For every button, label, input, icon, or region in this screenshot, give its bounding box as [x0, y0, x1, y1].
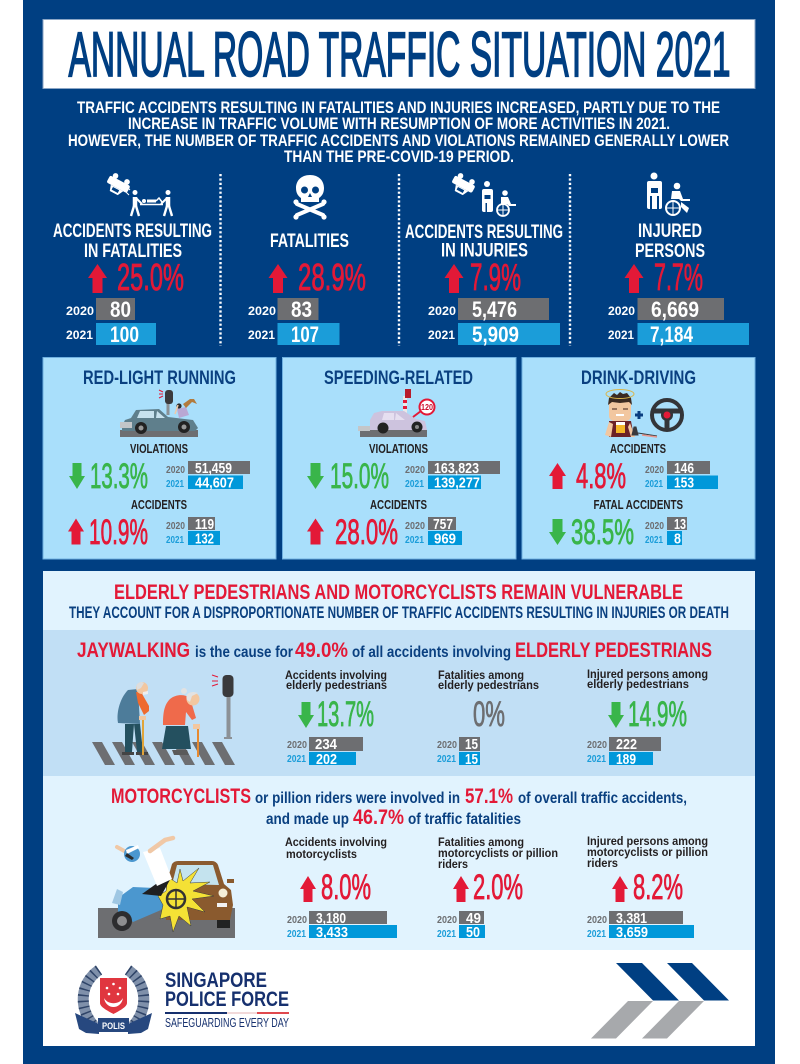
headline: of all accidents involving	[352, 644, 511, 661]
bars 2020 and 2021: 2020	[66, 304, 94, 318]
violations: 2020	[166, 465, 185, 476]
metric: injured persons among motorcyclists or pillion riders: 3,381	[616, 910, 647, 927]
accidents: 146	[674, 460, 694, 477]
metric: accidents involving elderly pedestrians: 234	[315, 736, 338, 753]
heading: IN FATALITIES	[84, 241, 182, 262]
metric: injured persons among elderly pedestrians: elderly pedestrians	[587, 677, 689, 691]
violations: VIOLATIONS	[130, 441, 188, 456]
stat: accidents resulting in injuries	[405, 171, 563, 347]
fatal accidents: 2021	[645, 535, 663, 546]
headline: 49.0%	[295, 639, 348, 662]
accidents: ACCIDENTS	[610, 441, 666, 456]
icon: chevrons	[591, 963, 729, 1038]
headline: ELDERLY PEDESTRIANS	[515, 639, 712, 662]
heading: FATALITIES	[270, 231, 349, 252]
logo: police crest: POLIS	[102, 1021, 125, 1031]
metric: fatalities among elderly pedestrians	[437, 668, 539, 768]
metric: injured persons among elderly pedestrians: 2020	[587, 740, 607, 751]
headline: 46.7%	[353, 806, 404, 829]
metric: fatalities among elderly pedestrians: 2021	[437, 754, 456, 765]
violations: 163,823	[434, 460, 479, 477]
bars 2020 and 2021: 100	[110, 322, 139, 347]
violations: 2020	[405, 465, 425, 476]
metric: fatalities among motorcyclists or pillion riders: motorcyclists or pillion	[438, 846, 558, 860]
metric: injured persons among motorcyclists or pillion riders: 2020	[587, 915, 607, 926]
change up 28.9%: 28.9%	[298, 257, 366, 299]
metric: fatalities among elderly pedestrians: 15	[465, 751, 478, 768]
change up 7.9%: 7.9%	[470, 257, 521, 299]
fatal accidents: FATAL ACCIDENTS	[594, 497, 683, 512]
bars 2020 and 2021	[248, 297, 340, 347]
accidents: 2021	[645, 479, 663, 490]
icon: overturned car and stretcher	[104, 171, 172, 216]
metric: accidents involving elderly pedestrians: 2021	[287, 754, 306, 765]
bars 2020 and 2021: 2020	[428, 304, 456, 318]
metric: fatalities among motorcyclists or pillion riders: Fatalities among	[438, 835, 524, 849]
violations: 51,459	[195, 460, 232, 477]
accidents: 2020	[405, 521, 425, 532]
metric: accidents involving elderly pedestrians: Accidents involving	[285, 668, 387, 682]
bars 2020 and 2021: 2021	[428, 328, 455, 342]
metric: fatalities among motorcyclists or pillion riders	[437, 835, 558, 941]
accidents: ACCIDENTS	[131, 497, 187, 512]
panel: red-light running	[43, 358, 276, 559]
bars 2020 and 2021	[428, 297, 560, 347]
bars 2020 and 2021: 5,909	[472, 322, 519, 347]
metric: accidents involving motorcyclists: 3,433	[316, 924, 348, 941]
metric: fatalities among elderly pedestrians: 15	[465, 736, 478, 753]
metric: injured persons among motorcyclists or pillion riders: motorcyclists or pillion	[587, 845, 708, 859]
metric: accidents involving elderly pedestrians	[285, 668, 387, 768]
bars 2020 and 2021	[66, 297, 156, 347]
metric: fatalities among elderly pedestrians: 2020	[437, 740, 457, 751]
metric: fatalities among elderly pedestrians: 0%	[473, 695, 505, 734]
bars 2020 and 2021: 107	[291, 322, 319, 347]
metric: accidents involving motorcyclists: 8.0%	[321, 868, 371, 907]
panel: motorcyclists	[43, 776, 755, 950]
intro text: THAN THE PRE-COVID-19 PERIOD.	[284, 147, 514, 166]
violations: 139,277	[434, 474, 480, 492]
icon: drunk man plus steering wheel	[605, 390, 682, 437]
metric: accidents involving motorcyclists: motorcyclists	[286, 847, 357, 861]
metric: fatalities among elderly pedestrians: elderly pedestrians	[438, 678, 539, 692]
headline: and made up	[266, 811, 349, 828]
logo: Singapore Police Force wordmark	[165, 969, 289, 1030]
headline: 57.1%	[465, 785, 513, 808]
heading: PERSONS	[635, 241, 705, 262]
metric: injured persons among elderly pedestrians: 14.9%	[628, 695, 687, 734]
violations	[307, 441, 500, 496]
icon: speeding car and speed camera	[358, 389, 434, 437]
bars 2020 and 2021: 2021	[248, 328, 275, 342]
headline: of traffic fatalities	[408, 811, 521, 828]
metric: accidents involving elderly pedestrians: 13.7%	[317, 695, 374, 734]
panel: elderly pedestrians	[43, 630, 755, 776]
violations: 15.0%	[330, 457, 389, 496]
panel: vulnerable road users header	[43, 571, 755, 630]
fatal accidents: 8	[674, 530, 681, 548]
icon: speeding car and speed camera: 120	[421, 403, 433, 412]
accidents: ACCIDENTS	[370, 497, 427, 512]
bars 2020 and 2021: 2021	[608, 328, 634, 342]
accidents: 28.0%	[335, 513, 398, 552]
accidents: 2021	[166, 535, 184, 546]
violations: 13.3%	[90, 457, 148, 496]
stat: accidents resulting in fatalities	[53, 171, 212, 347]
violations: VIOLATIONS	[369, 441, 428, 456]
intro text	[68, 98, 729, 166]
metric: accidents involving motorcyclists: 3,180	[316, 910, 346, 927]
heading: ACCIDENTS RESULTING	[53, 221, 212, 242]
metric: injured persons among motorcyclists or pillion riders: Injured persons among	[587, 834, 708, 848]
metric: injured persons among motorcyclists or pillion riders: 2021	[587, 929, 606, 940]
change up 25.0%: 25.0%	[117, 257, 184, 299]
footer panel	[43, 950, 755, 1046]
metric: accidents involving elderly pedestrians: elderly pedestrians	[286, 678, 387, 692]
change up 28.9%	[268, 257, 366, 299]
change up 7.7%: 7.7%	[654, 257, 703, 299]
logo: Singapore Police Force wordmark: SINGAPORE	[165, 969, 267, 992]
heading	[405, 222, 563, 262]
stat: fatalities	[248, 175, 366, 347]
bars 2020 and 2021: 2020	[248, 304, 276, 318]
accidents: 757	[433, 516, 453, 533]
metric: injured persons among motorcyclists or pillion riders: 8.2%	[633, 868, 683, 907]
headline	[77, 639, 712, 662]
headline: JAYWALKING	[77, 639, 190, 662]
bars 2020 and 2021: 7,184	[650, 322, 694, 347]
bars 2020 and 2021: 5,476	[472, 297, 517, 322]
violations: 2021	[405, 479, 424, 490]
metric: injured persons among elderly pedestrians	[587, 667, 708, 768]
logo: Singapore Police Force wordmark: SAFEGUARDING EVERY DAY	[165, 1015, 289, 1030]
violations: 2021	[166, 479, 184, 490]
metric: accidents involving elderly pedestrians: 202	[316, 751, 337, 768]
accidents: 969	[434, 530, 456, 548]
accidents	[68, 497, 220, 552]
logo: Singapore Police Force wordmark: POLICE FORCE	[165, 988, 289, 1011]
metric: fatalities among motorcyclists or pillion riders: 2.0%	[473, 868, 523, 907]
headline	[111, 785, 687, 829]
heading: ACCIDENTS RESULTING	[405, 222, 563, 243]
accidents: 2020	[645, 465, 664, 476]
headline: or pillion riders were involved in	[255, 790, 460, 807]
illustration: elderly couple at crossing	[92, 675, 235, 765]
heading: IN INJURIES	[441, 240, 528, 262]
metric: accidents involving motorcyclists: 2020	[287, 915, 307, 926]
headline: MOTORCYCLISTS	[111, 785, 251, 808]
bars 2020 and 2021: 80	[110, 297, 131, 322]
intro text: INCREASE IN TRAFFIC VOLUME WITH RESUMPTION OF MORE ACTIVITIES IN 2021.	[128, 114, 670, 133]
accidents: 2020	[166, 521, 185, 532]
fatal accidents	[549, 497, 687, 552]
heading: SPEEDING-RELATED	[324, 368, 473, 389]
metric: fatalities among motorcyclists or pillion riders: 2020	[437, 915, 457, 926]
metric: accidents involving elderly pedestrians: 2020	[287, 740, 307, 751]
panel: speeding-related	[282, 358, 516, 559]
fatal accidents: 38.5%	[571, 513, 634, 552]
metric: fatalities among motorcyclists or pillion riders: 2021	[437, 929, 456, 940]
metric: accidents involving motorcyclists	[285, 835, 397, 941]
metric: accidents involving motorcyclists: 2021	[287, 929, 306, 940]
accidents	[549, 441, 718, 496]
metric: fatalities among motorcyclists or pillion riders: 50	[466, 924, 480, 941]
metric: accidents involving motorcyclists: Accidents involving	[285, 835, 387, 849]
logo: police crest	[75, 970, 152, 1034]
bars 2020 and 2021	[608, 297, 749, 347]
accidents: 119	[195, 516, 214, 533]
icon: injured people	[647, 172, 690, 215]
fatal accidents: 13	[674, 516, 686, 533]
heading: RED-LIGHT RUNNING	[83, 368, 236, 389]
metric: fatalities among motorcyclists or pillion riders: 49	[466, 910, 481, 927]
bars 2020 and 2021: 2021	[66, 328, 93, 342]
icon: car hitting pedestrian at red light	[120, 390, 198, 437]
heading: INJURED	[638, 221, 702, 242]
panel: drink-driving	[522, 358, 755, 559]
headline: of overall traffic accidents,	[518, 790, 687, 807]
accidents: 132	[195, 530, 214, 548]
metric: injured persons among elderly pedestrians: 222	[616, 736, 637, 753]
accidents: 10.9%	[89, 513, 148, 552]
bars 2020 and 2021: 83	[291, 297, 312, 322]
bars 2020 and 2021: 6,669	[651, 297, 699, 322]
heading: DRINK-DRIVING	[581, 368, 696, 389]
violations: 44,607	[195, 474, 234, 492]
heading	[53, 221, 212, 262]
metric: injured persons among elderly pedestrians: Injured persons among	[587, 667, 708, 681]
metric: injured persons among elderly pedestrians: 189	[616, 751, 636, 768]
metric: injured persons among elderly pedestrians: 2021	[587, 754, 606, 765]
icon: overturned car and injured people	[449, 171, 516, 216]
metric: fatalities among motorcyclists or pillion riders: riders	[438, 857, 468, 871]
headline: is the cause for	[195, 644, 293, 661]
icon: skull and crossbones	[293, 175, 327, 220]
change up 7.9%	[444, 257, 521, 299]
illustration: motorcycle colliding with car	[98, 838, 235, 938]
change up 25.0%	[88, 257, 184, 299]
heading	[635, 221, 705, 262]
accidents	[307, 497, 462, 552]
metric: injured persons among motorcyclists or pillion riders: 3,659	[616, 924, 648, 941]
violations	[69, 441, 250, 496]
change up 7.7%	[624, 257, 703, 299]
fatal accidents: 2020	[645, 521, 664, 532]
metric: injured persons among motorcyclists or pillion riders: riders	[587, 856, 618, 870]
metric: injured persons among motorcyclists or pillion riders	[587, 834, 708, 941]
accidents: 153	[674, 474, 694, 492]
accidents: 2021	[405, 535, 424, 546]
accidents: 4.8%	[576, 457, 626, 496]
bars 2020 and 2021: 2020	[608, 304, 635, 318]
metric: fatalities among elderly pedestrians: Fatalities among	[438, 668, 524, 682]
stat: injured persons	[608, 172, 749, 347]
